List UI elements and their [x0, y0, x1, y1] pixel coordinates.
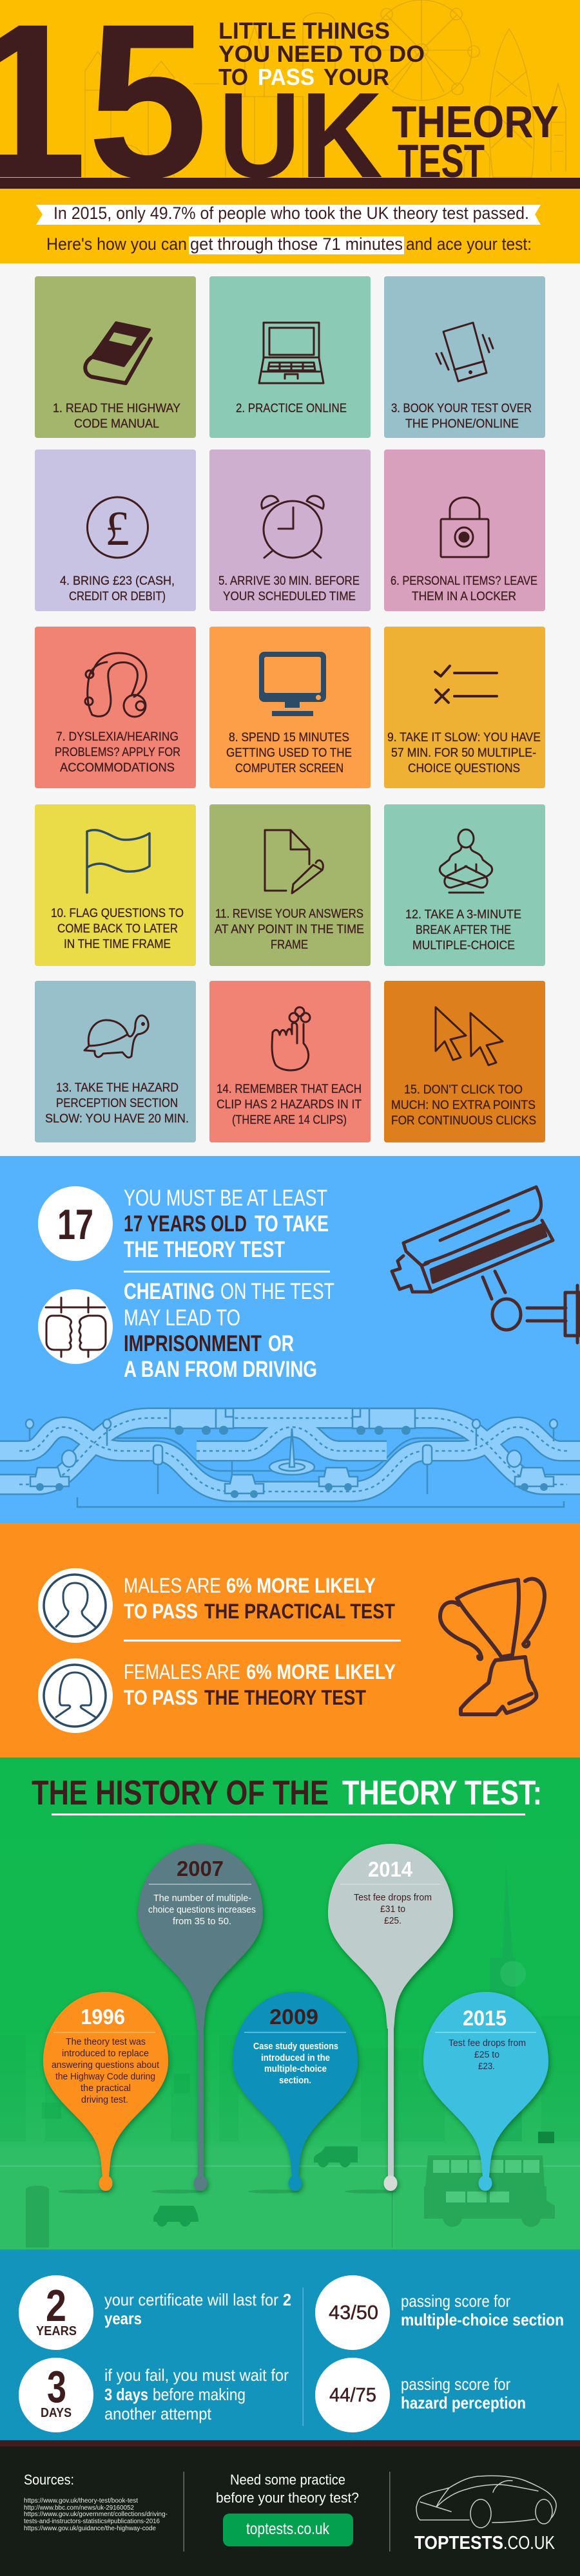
badge: 43/50: 43/50: [329, 2301, 378, 2324]
timeline pin: 2015: £25 to: [474, 2049, 499, 2060]
timeline pin: 2007: choice questions increases: [148, 1904, 256, 1915]
icon: book: [85, 323, 151, 383]
sources list: http://www.bbc.com/news/uk-29160052: [24, 2505, 134, 2512]
icon: security camera: [392, 1187, 580, 1343]
panel: tip 13: 13. TAKE THE HAZARD: [56, 1081, 179, 1095]
badge: 44/75: [315, 2358, 390, 2432]
panel: tip 8: [209, 627, 371, 788]
panel: tip 2: [209, 276, 371, 438]
panel: tip 8: GETTING USED TO THE: [226, 746, 352, 760]
timeline pin: 2009: Case study questions: [253, 2041, 338, 2052]
title text: UK: [218, 68, 383, 204]
vehicle: taxi lower: [153, 2206, 198, 2227]
decorative ground shadows: [58, 2190, 396, 2193]
panel: tip 9: [384, 627, 545, 788]
icon: cursors: [436, 1007, 503, 1065]
text: cheating warning: A BAN FROM DRIVING: [124, 1357, 317, 1382]
panel: tip 5: [209, 450, 371, 611]
logo: toptests: .CO.UK: [503, 2533, 556, 2553]
panel: tip 2: 2. PRACTICE ONLINE: [236, 402, 347, 415]
timeline pin: 2014: £31 to: [380, 1904, 405, 1915]
timeline pin: 2007: from 35 to 50.: [173, 1916, 231, 1927]
timeline pin: 2009: 2009: [269, 2005, 318, 2029]
text: females stat: THE THEORY TEST: [204, 1686, 366, 1709]
panel: tip 1: 1. READ THE HIGHWAY: [53, 402, 180, 415]
timeline pin: 2009: [233, 1992, 358, 2191]
panel: tip 8: 8. SPEND 15 MINUTES: [229, 731, 349, 744]
sources list: [24, 2472, 168, 2532]
panel: tip 7: [35, 627, 196, 788]
panel: footer: [0, 2440, 580, 2576]
text: retake wait: if you fail, you must wait for: [104, 2365, 289, 2385]
panel: tip 13: PERCEPTION SECTION: [56, 1097, 178, 1110]
text: retake wait: [104, 2365, 289, 2423]
panel: orange gender stats: [0, 1523, 580, 1757]
panel: tip 12: 12. TAKE A 3-MINUTE: [405, 908, 521, 922]
icon: handcuffs badge: [38, 1289, 113, 1364]
timeline pin: 1996: The theory test was: [66, 2036, 146, 2047]
panel: tip 9: CHOICE QUESTIONS: [408, 762, 520, 775]
text: cheating warning: IMPRISONMENT: [124, 1331, 262, 1356]
text: hazard pass mark: hazard perception: [401, 2393, 526, 2412]
call to action: Need some practice: [230, 2472, 345, 2488]
panel: tip 14: [209, 981, 371, 1142]
logo: toptests: TOPTESTS: [414, 2533, 503, 2553]
panel: tip 4: CREDIT OR DEBIT): [69, 590, 166, 603]
badge: 2 years: YEARS: [36, 2324, 77, 2338]
panel: header: [0, 0, 580, 263]
sources list: https://www.gov.uk/government/collections/driving-: [24, 2511, 168, 2518]
title text: THEORY: [392, 97, 559, 147]
text: hazard pass mark: [401, 2374, 526, 2412]
title text: [218, 17, 559, 204]
text: minimum age: YOU MUST BE AT LEAST: [124, 1186, 327, 1211]
icon: laptop: [259, 323, 324, 383]
sources list: Sources:: [24, 2472, 74, 2488]
vehicle: phone box: [26, 2186, 49, 2248]
badge: 3 days: DAYS: [41, 2406, 72, 2420]
badge: 43/50: [315, 2275, 390, 2350]
panel: tip 1: CODE MANUAL: [74, 417, 159, 431]
text: females stat: FEMALES ARE: [124, 1660, 240, 1683]
decorative London skyline: [85, 0, 566, 177]
panel: tip 9: 57 MIN. FOR 50 MULTIPLE-: [391, 746, 536, 760]
panel: tip 12: BREAK AFTER THE: [416, 923, 511, 937]
panel: tip 14: CLIP HAS 2 HAZARDS IN IT: [217, 1098, 362, 1112]
panel: tip 13: SLOW: YOU HAVE 20 MIN.: [45, 1112, 189, 1126]
text: retake wait: before making: [153, 2385, 246, 2404]
road illustration: [0, 1408, 580, 1507]
intro line: get through those 71 minutes: [190, 234, 403, 254]
timeline pin: 2009: section.: [279, 2075, 311, 2086]
panel: tip 15: MUCH: NO EXTRA POINTS: [391, 1099, 536, 1112]
icon: finger with bow: [272, 1007, 310, 1070]
panel: tip 12: MULTIPLE-CHOICE: [412, 939, 515, 952]
panel: blue facts: [0, 1156, 580, 1523]
timeline pin: 2014: [328, 1844, 453, 2191]
panel: tip 14: (THERE ARE 14 CLIPS): [232, 1113, 347, 1127]
title text: TEST: [398, 136, 485, 187]
sources list: https://www.gov.uk/theory-test/book-test: [24, 2497, 138, 2505]
icon: vibrating phone: [436, 323, 493, 381]
icon: document and pencil: [265, 830, 323, 893]
panel: history timeline: [0, 1757, 580, 2249]
icon: monitor: [259, 652, 326, 716]
decorative city silhouette: [0, 1866, 580, 2143]
text: minimum age: TO TAKE: [255, 1211, 329, 1236]
panel: tip 3: [384, 276, 545, 438]
title text: YOUR: [324, 64, 389, 90]
text: certificate: your certificate will last for: [104, 2290, 278, 2309]
sources list: https://www.gov.uk/guidance/the-highway-code: [24, 2525, 156, 2532]
text: males stat: 6% MORE LIKELY: [226, 1574, 376, 1597]
text: cheating warning: ON THE TEST: [220, 1279, 334, 1304]
icon: flag: [87, 830, 150, 893]
intro line: [46, 234, 532, 254]
panel: tip 10: 10. FLAG QUESTIONS TO: [51, 907, 184, 920]
text: certificate: 2: [283, 2290, 291, 2309]
panel: tip 11: AT ANY POINT IN THE TIME: [215, 923, 364, 936]
icon: female avatar: [38, 1658, 113, 1733]
intro line: and ace your test:: [406, 234, 532, 254]
timeline pin: 2015: £23.: [478, 2061, 495, 2072]
icon: turtle: [84, 1016, 148, 1057]
text: females stat: [124, 1660, 396, 1709]
call to action: toptests.co.uk: [246, 2520, 329, 2538]
text: minimum age: THE THEORY TEST: [124, 1237, 285, 1262]
call to action: before your theory test?: [216, 2490, 359, 2506]
text: minimum age: [124, 1186, 329, 1262]
icon: age 17 badge: 17: [57, 1200, 93, 1248]
icon: trophy with boot: [440, 1579, 545, 1714]
panel: teal key facts: [0, 2249, 580, 2440]
text: retake wait: 3 days: [104, 2385, 148, 2404]
panel: tip 10: IN THE TIME FRAME: [64, 938, 171, 951]
panel: tip 15: [384, 981, 545, 1142]
panel: tip 4: [35, 450, 196, 611]
title text: TO: [218, 64, 248, 90]
badge: 3 days: [19, 2358, 93, 2432]
panel: tip 9: 9. TAKE IT SLOW: YOU HAVE: [387, 731, 541, 744]
text: multiple-choice pass mark: [401, 2291, 564, 2329]
text: hazard pass mark: passing score for: [401, 2374, 510, 2394]
heading: THE HISTORY OF THE: [32, 1774, 329, 1812]
timeline pin: 2009: introduced in the: [261, 2052, 330, 2063]
timeline pin: 2007: The number of multiple-: [153, 1893, 251, 1904]
title text: PASS: [258, 64, 314, 90]
panel: tip 7: ACCOMMODATIONS: [60, 761, 175, 775]
icon: padlock: [441, 497, 488, 557]
panel: tip 10: COME BACK TO LATER: [57, 922, 178, 936]
panel: tip 11: [209, 804, 371, 966]
text: cheating warning: MAY LEAD TO: [124, 1305, 240, 1331]
text: certificate: years: [104, 2309, 142, 2328]
icon: alarm clock: [262, 496, 324, 558]
icon: hearing aid: [85, 653, 146, 717]
logo: toptests: [414, 2476, 556, 2553]
text: multiple-choice pass mark: passing score for: [401, 2291, 510, 2311]
panel: tip 3: 3. BOOK YOUR TEST OVER: [391, 402, 532, 415]
text: cheating warning: OR: [268, 1331, 294, 1356]
text: minimum age: 17 YEARS OLD: [124, 1211, 247, 1236]
timeline pin: 2015: Test fee drops from: [449, 2038, 526, 2049]
panel: tip 6: 6. PERSONAL ITEMS? LEAVE: [391, 574, 537, 588]
text: males stat: THE PRACTICAL TEST: [204, 1600, 395, 1623]
intro line: Here's how you can: [46, 234, 187, 254]
road vehicles and street furniture: [26, 1408, 557, 1493]
badge: 2 years: [19, 2275, 93, 2350]
panel: tip 8: COMPUTER SCREEN: [235, 762, 343, 775]
text: males stat: [124, 1574, 395, 1623]
icon: pound coin: £: [105, 502, 130, 556]
text: males stat: TO PASS: [124, 1600, 198, 1623]
panel: tip 11: 11. REVISE YOUR ANSWERS: [215, 907, 363, 921]
icon: male avatar: [38, 1568, 113, 1643]
badge: 44/75: 44/75: [329, 2383, 376, 2406]
timeline pin: 2014: Test fee drops from: [354, 1892, 432, 1903]
timeline pin: 1996: 1996: [81, 2005, 125, 2029]
panel: tip 1: [35, 276, 196, 438]
intro ribbon: In 2015, only 49.7% of people who took the UK theory test passed.: [53, 204, 529, 223]
panel: tip 5: YOUR SCHEDULED TIME: [223, 590, 356, 603]
panel: tip 11: FRAME: [271, 938, 308, 952]
vehicle: taxi upper: [314, 2146, 358, 2168]
title number 15: [0, 0, 580, 224]
panel: tip 7: 7. DYSLEXIA/HEARING: [56, 730, 179, 744]
timeline pin: 2007: [138, 1844, 263, 2191]
timeline pin: 2014: 2014: [368, 1857, 413, 1881]
title text: YOU NEED TO DO: [218, 41, 425, 67]
vehicle: bus: [424, 2155, 555, 2227]
timeline pin: 2007: 2007: [177, 1857, 224, 1880]
panel: tip 15: 15. DON'T CLICK TOO: [404, 1083, 523, 1097]
icon: age 17 badge: [38, 1186, 113, 1261]
timeline pin: 1996: driving test.: [81, 2094, 128, 2105]
panel: tip 13: [35, 981, 196, 1142]
timeline pin: 1996: introduced to replace: [62, 2048, 149, 2059]
timeline pin: 1996: the practical: [81, 2083, 131, 2094]
text: females stat: 6% MORE LIKELY: [246, 1660, 396, 1683]
timeline pin: 2015: 2015: [463, 2006, 507, 2030]
panel: tip 5: 5. ARRIVE 30 MIN. BEFORE: [218, 574, 360, 588]
road strands: [0, 1418, 580, 1492]
panel: tip 3: THE PHONE/ONLINE: [405, 417, 519, 431]
text: females stat: TO PASS: [124, 1686, 198, 1709]
text: certificate: [104, 2290, 291, 2328]
timeline pin: 2014: £25.: [384, 1915, 401, 1926]
panel: tip 4: 4. BRING £23 (CASH,: [60, 574, 175, 588]
panel: tip 14: 14. REMEMBER THAT EACH: [217, 1083, 362, 1096]
text: males stat: MALES ARE: [124, 1574, 221, 1597]
sources list: tests-and-instructors-statistics#publications-2016: [24, 2518, 160, 2525]
panel: tip 7: PROBLEMS? APPLY FOR: [55, 746, 180, 759]
timeline pin: 1996: the Highway Code during: [55, 2071, 155, 2082]
icon: meditation: [440, 829, 492, 893]
title text: LITTLE THINGS: [218, 17, 390, 44]
text: retake wait: another attempt: [104, 2404, 212, 2423]
panel: tip 12: [384, 804, 545, 966]
timeline pin: 2009: multiple-choice: [264, 2063, 327, 2074]
icon: pound coin: [88, 497, 148, 558]
timeline pin: 1996: answering questions about: [52, 2060, 160, 2070]
text: cheating warning: [124, 1279, 334, 1382]
panel: tip 6: [384, 450, 545, 611]
call to action: [216, 2472, 359, 2546]
text: cheating warning: CHEATING: [124, 1279, 215, 1304]
timeline pin: 1996: [43, 1992, 168, 2191]
badge: 2 years: 2: [46, 2280, 66, 2331]
timeline pin: 2015: [423, 1992, 548, 2191]
panel: tip 6: THEM IN A LOCKER: [412, 590, 516, 603]
badge: 3 days: 3: [47, 2362, 66, 2412]
icon: check list: [435, 666, 497, 703]
panel: tip 15: FOR CONTINUOUS CLICKS: [391, 1114, 536, 1128]
panel: tip 10: [35, 804, 196, 966]
